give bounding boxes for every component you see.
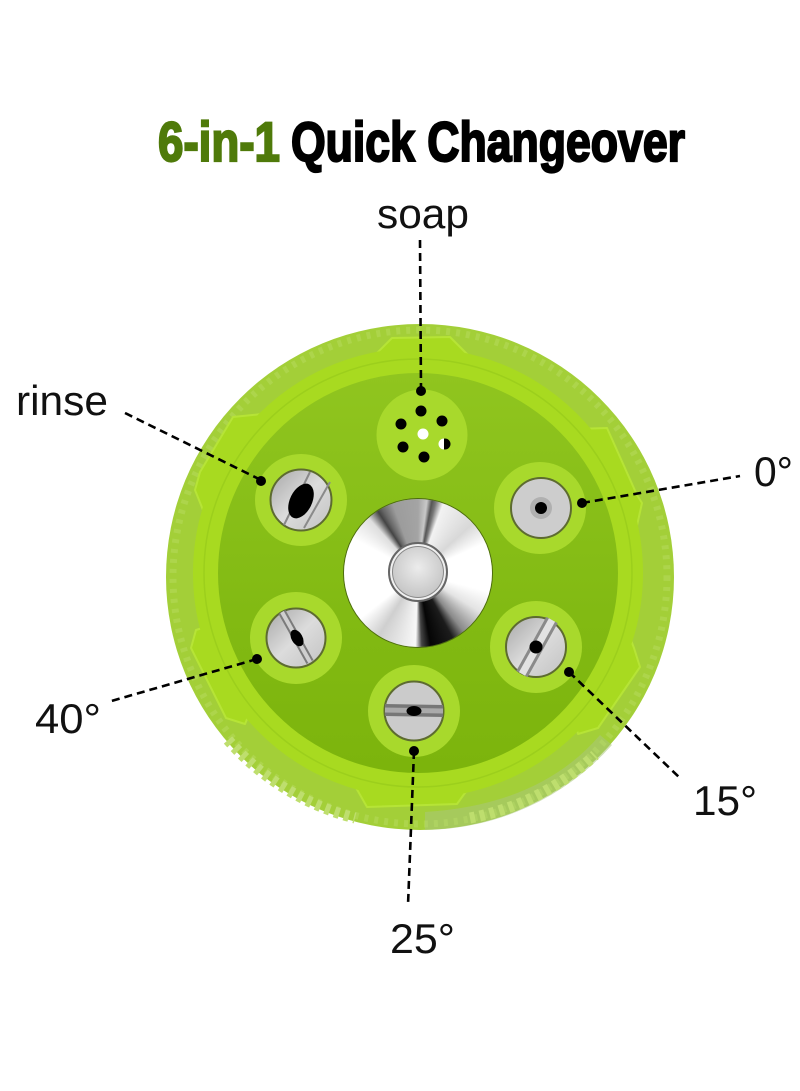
callout: 15 degrees: 15°: [693, 777, 757, 824]
callout: 0 degrees: 0°: [754, 448, 793, 495]
outer grip: [166, 324, 674, 830]
callout: 40 degrees: [35, 654, 262, 742]
rinse nozzle: [255, 454, 347, 546]
callout: soap: [377, 190, 469, 396]
title: [158, 110, 685, 173]
steel center valve: [344, 499, 492, 647]
title: Quick Changeover: [291, 110, 685, 173]
callout: 40 degrees: 40°: [35, 695, 101, 742]
15 degree nozzle: [490, 601, 582, 693]
0 degree nozzle: [494, 462, 586, 554]
callout: rinse: rinse: [16, 377, 108, 424]
callout: 15 degrees: [564, 667, 757, 824]
callout: rinse: [16, 377, 266, 486]
callout: soap: soap: [377, 190, 469, 237]
40 degree nozzle: [250, 592, 342, 684]
title: 6-in-1: [158, 110, 280, 173]
outer rim ring: [206, 361, 630, 785]
callout: 0 degrees: [577, 448, 793, 508]
nozzle head body: [166, 324, 674, 830]
soap nozzle: [376, 390, 468, 480]
grip ridges: [173, 330, 667, 824]
25 degree nozzle: [368, 665, 460, 757]
callout: 25 degrees: [390, 746, 455, 962]
inner dish: [218, 373, 618, 773]
rim tabs: [191, 337, 642, 807]
callout: 25 degrees: 25°: [390, 915, 455, 962]
